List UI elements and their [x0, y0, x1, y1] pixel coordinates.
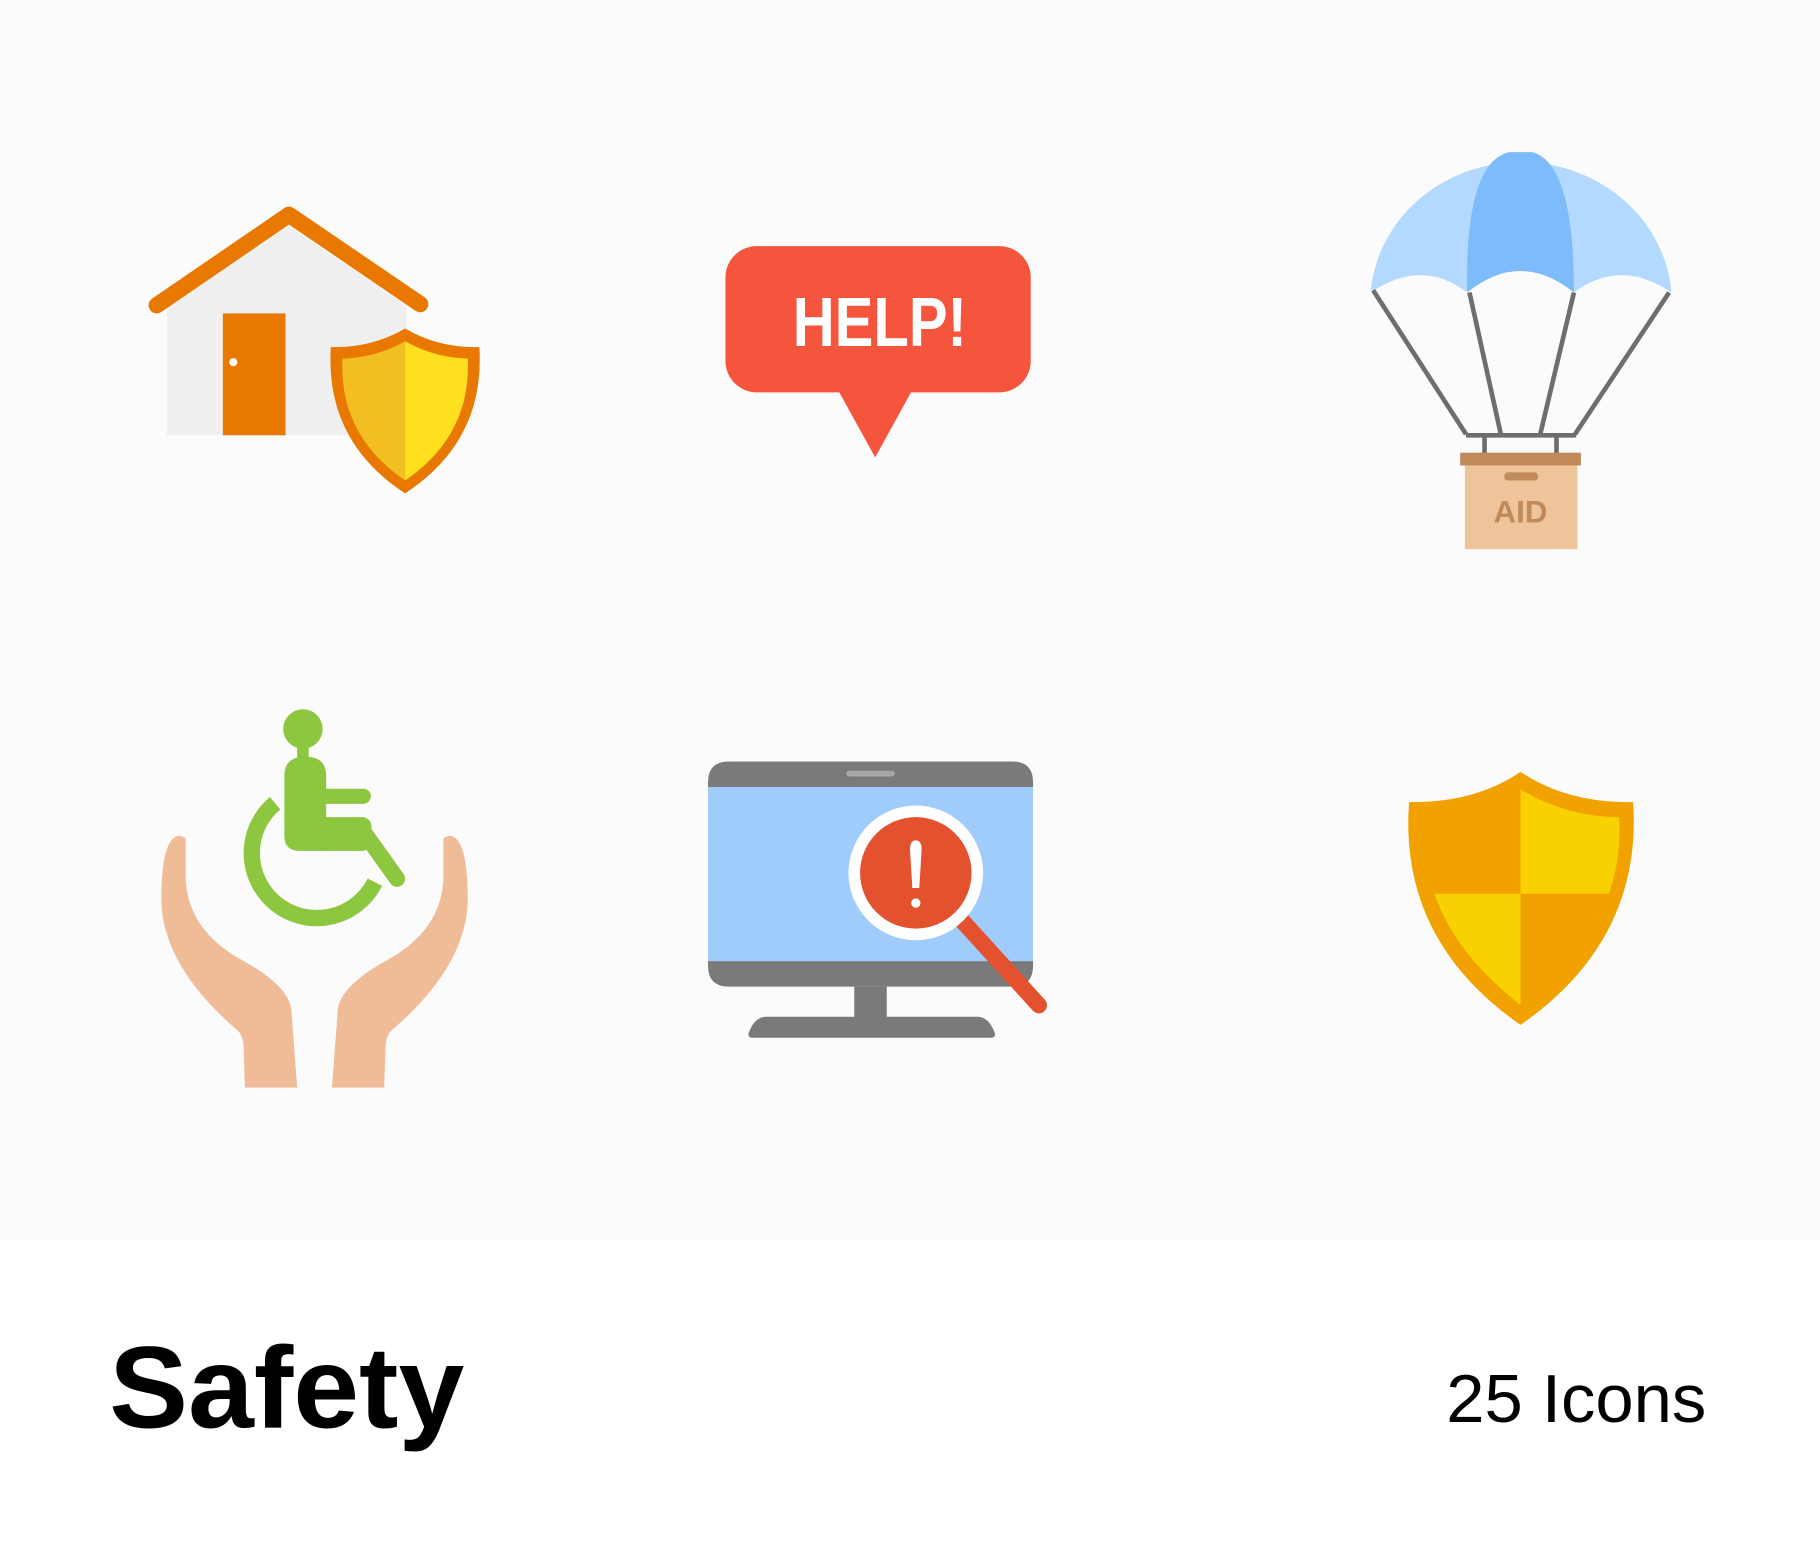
icon: help speech bubble [725, 246, 1031, 457]
icon: house with shield [157, 215, 480, 493]
icon: quartered shield [1408, 772, 1634, 1025]
icon: parachute with aid box: AID [1494, 494, 1548, 529]
icon: hands holding wheelchair symbol [161, 709, 468, 1088]
icon: parachute with aid box [1371, 152, 1671, 549]
icon: monitor with magnifier alert [708, 761, 1039, 1038]
icon: help speech bubble: HELP! [793, 283, 967, 361]
title: Safety [109, 1323, 464, 1453]
icon count: 25 Icons [1446, 1362, 1706, 1437]
